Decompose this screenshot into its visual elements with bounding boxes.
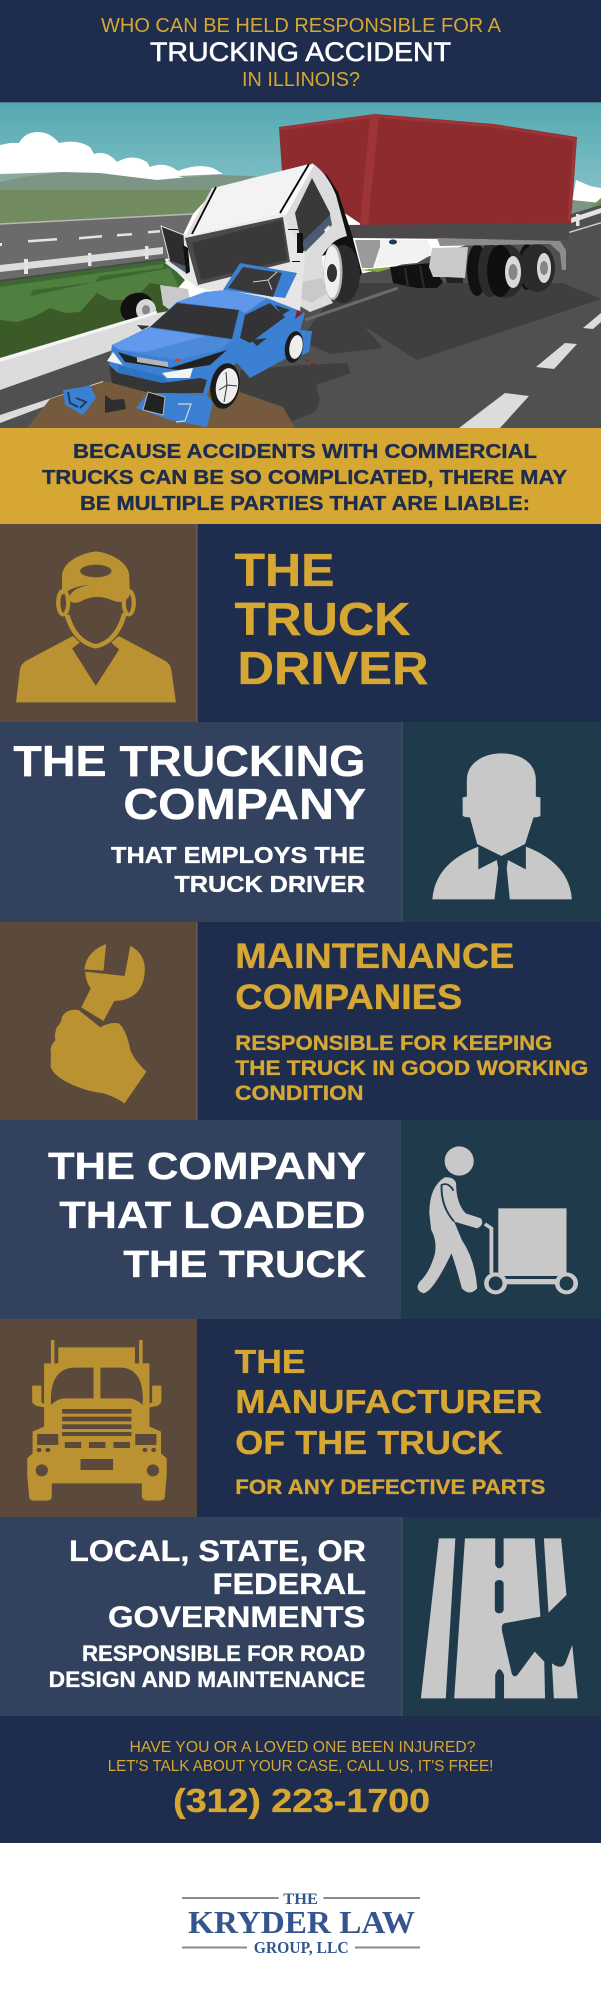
heading: THAT LOADED — [59, 1195, 365, 1237]
panel: the trucking company — [0, 722, 601, 922]
heading: THE — [235, 1344, 306, 1381]
call to action text — [108, 1739, 493, 1775]
heading: TRUCK — [234, 593, 410, 645]
panel: the truck driver — [0, 524, 601, 722]
logo: the kryder law group: KRYDER LAW — [188, 1904, 415, 1940]
icon: cracked road — [421, 1538, 578, 1698]
header band — [0, 0, 601, 102]
heading — [235, 937, 514, 1017]
heading: FEDERAL — [213, 1568, 366, 1601]
heading: LOCAL, STATE, OR — [69, 1535, 366, 1568]
phone number: (312) 223-1700 — [173, 1782, 430, 1819]
subheading: THE TRUCK IN GOOD WORKING — [235, 1057, 588, 1080]
heading — [13, 737, 366, 829]
subheading — [111, 842, 365, 897]
logo: the kryder law group: GROUP, LLC — [254, 1938, 349, 1957]
logo: the kryder law group — [182, 1891, 420, 1957]
gold intro banner — [0, 428, 601, 524]
heading: THE TRUCK — [123, 1244, 367, 1286]
heading — [235, 1344, 542, 1462]
call to action text: HAVE YOU OR A LOVED ONE BEEN INJURED? — [130, 1739, 476, 1756]
heading: THE — [234, 544, 334, 596]
banner line 3: BE MULTIPLE PARTIES THAT ARE LIABLE: — [80, 493, 530, 515]
panel: the company that loaded the truck — [0, 1120, 601, 1319]
illustration: truck and car crash on highway — [0, 102, 601, 428]
heading: OF THE TRUCK — [235, 1425, 503, 1462]
heading: THE TRUCKING — [13, 737, 365, 786]
subheading: RESPONSIBLE FOR ROAD — [82, 1641, 365, 1666]
logo: the kryder law group: THE — [283, 1891, 318, 1908]
subheading: THAT EMPLOYS THE — [111, 842, 365, 868]
banner line 2: TRUCKS CAN BE SO COMPLICATED, THERE MAY — [42, 467, 568, 489]
heading — [69, 1535, 366, 1634]
panel: maintenance companies — [0, 922, 601, 1120]
subheading — [235, 1032, 588, 1105]
panel: the manufacturer of the truck — [0, 1319, 601, 1517]
subheading: DESIGN AND MAINTENANCE — [49, 1667, 365, 1692]
header line 3: IN ILLINOIS? — [242, 69, 360, 91]
heading: COMPANIES — [235, 978, 462, 1017]
heading — [234, 544, 428, 694]
banner line 1: BECAUSE ACCIDENTS WITH COMMERCIAL — [73, 441, 537, 463]
icon: hand holding wrench — [51, 944, 146, 1103]
heading: MAINTENANCE — [235, 937, 514, 976]
header line 2: TRUCKING ACCIDENT — [150, 37, 451, 67]
panel: local, state, or federal governments — [0, 1517, 601, 1716]
heading: GOVERNMENTS — [108, 1601, 365, 1634]
header line 1: WHO CAN BE HELD RESPONSIBLE FOR A — [101, 15, 502, 37]
heading: MANUFACTURER — [235, 1384, 542, 1421]
heading: DRIVER — [238, 642, 428, 694]
heading: THE COMPANY — [48, 1146, 366, 1188]
icon: truck front view — [27, 1340, 167, 1501]
subheading — [49, 1641, 365, 1692]
heading: COMPANY — [123, 780, 366, 829]
icon: person pushing loaded cart — [418, 1146, 576, 1293]
subheading: RESPONSIBLE FOR KEEPING — [235, 1032, 552, 1055]
call to action text: LET'S TALK ABOUT YOUR CASE, CALL US, IT'S FREE! — [108, 1758, 493, 1775]
subheading: TRUCK DRIVER — [174, 871, 365, 897]
icon: driver with cap — [16, 551, 176, 702]
subheading: FOR ANY DEFECTIVE PARTS — [235, 1476, 545, 1499]
icon: businessman — [432, 753, 572, 899]
subheading: CONDITION — [235, 1082, 364, 1105]
footer call to action — [0, 1716, 601, 1843]
heading — [48, 1146, 367, 1286]
